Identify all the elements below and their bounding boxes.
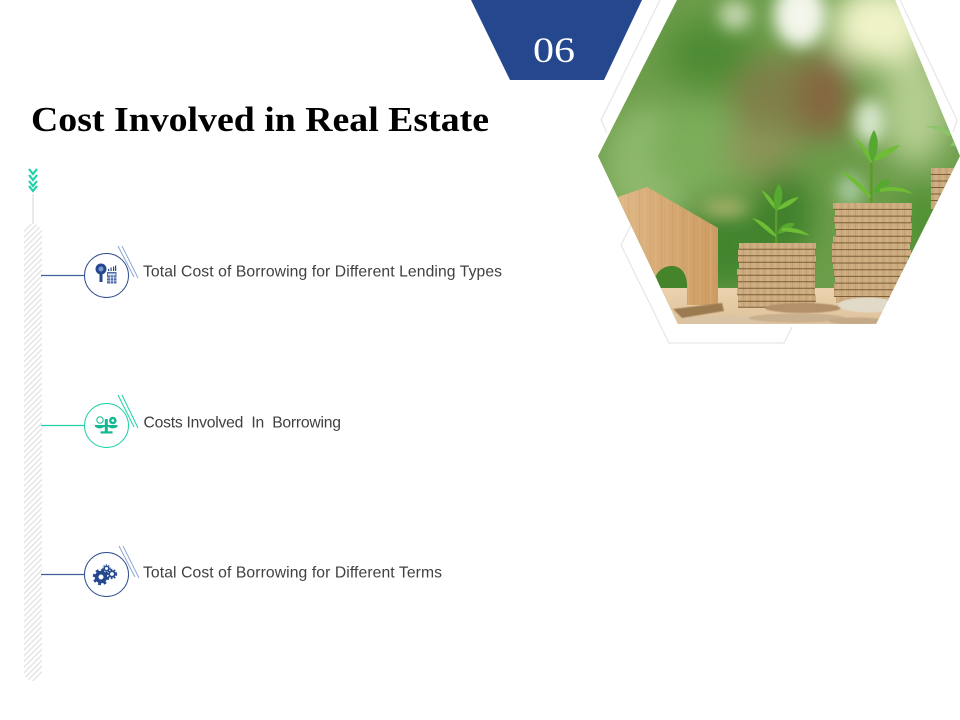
icon: gears	[94, 565, 116, 584]
icon: magnifier and calculator	[96, 264, 116, 284]
number banner	[471, 0, 642, 80]
title: Cost Involved in Real Estate	[31, 100, 489, 139]
accent strokes	[119, 546, 139, 578]
item 3 label: Total Cost of Borrowing for Different Terms	[143, 564, 442, 582]
item 3	[41, 546, 442, 596]
plant tall	[839, 130, 913, 203]
plant right	[926, 126, 958, 146]
accent strokes	[118, 395, 138, 428]
timeline: chevrons	[29, 169, 37, 191]
table surface	[661, 288, 894, 324]
coin stack right	[931, 168, 954, 209]
coin stack small	[737, 243, 816, 308]
timeline: connector line	[32, 194, 34, 225]
hexagon outlines	[601, 0, 957, 343]
blurred green background	[590, 0, 960, 330]
item 2	[41, 395, 341, 448]
section number: 06	[533, 30, 575, 70]
item 2 label: Costs Involved In Borrowing	[144, 414, 341, 432]
item 1	[41, 246, 502, 298]
icon: balance scale	[95, 417, 118, 434]
timeline: hatched bar	[24, 224, 42, 681]
plant small	[752, 184, 810, 243]
accent strokes	[118, 246, 138, 278]
hexagon photo: plants on coin stacks and wooden house	[590, 0, 960, 330]
door opening	[656, 266, 687, 288]
item 1 label: Total Cost of Borrowing for Different Lending Types	[143, 264, 502, 280]
icon: wooden house	[612, 187, 718, 305]
coins on table	[673, 298, 898, 324]
coin stack tall	[832, 203, 912, 303]
